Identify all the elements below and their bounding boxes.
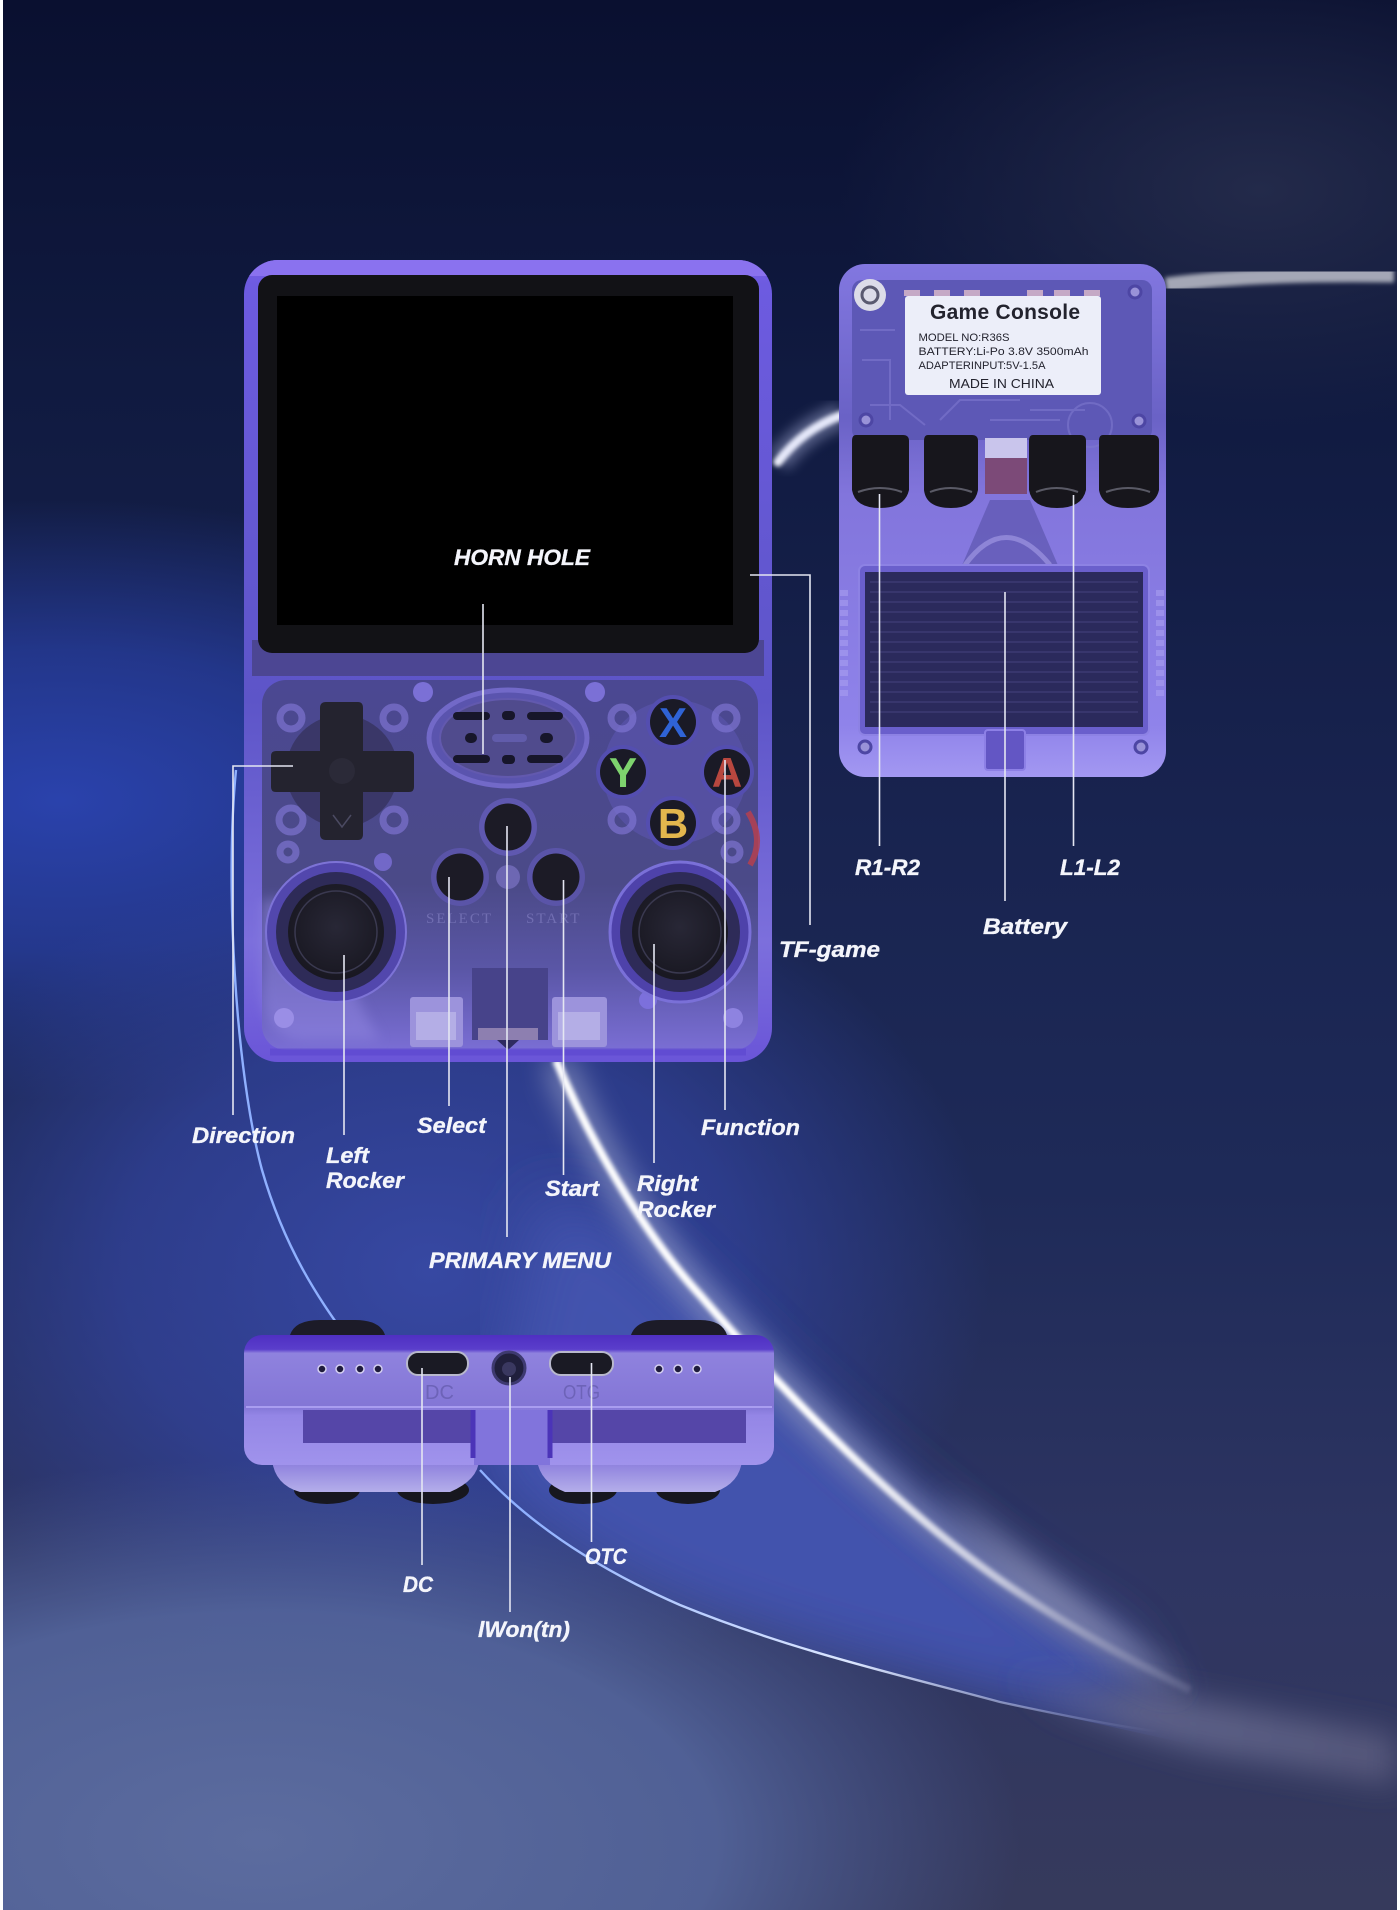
bottom edge <box>270 1048 746 1056</box>
callout: Horn Hole: HORN HOLE <box>454 545 591 570</box>
product label: MODEL NO:R36S <box>918 332 1010 344</box>
bottom latch <box>985 730 1025 770</box>
center hinge <box>960 500 1060 570</box>
chin band under screen <box>252 640 764 676</box>
screws <box>859 286 1147 753</box>
callout: Function: Function <box>701 1115 800 1140</box>
callout: TF-game: TF-game <box>779 937 880 962</box>
callout: Right Rocker <box>637 944 717 1222</box>
callout: Direction <box>192 766 295 1148</box>
bottom view console <box>244 1320 774 1504</box>
ABXY backing <box>603 700 747 844</box>
product label <box>905 296 1101 395</box>
arc: thin blue curve <box>232 770 1160 1732</box>
shell <box>839 264 1166 777</box>
ribbon <box>985 438 1027 460</box>
top sticks <box>290 1320 385 1335</box>
callout: Left Rocker: Left <box>326 1143 371 1168</box>
product label: ADAPTERINPUT:5V-1.5A <box>918 360 1046 372</box>
side grip ridges <box>844 590 1160 700</box>
callout: Battery: Battery <box>983 914 1069 939</box>
body shell <box>244 260 772 1062</box>
right stick <box>610 862 750 1002</box>
lower control panel <box>262 680 758 1050</box>
screen <box>277 296 733 625</box>
callout: Select: Select <box>417 1113 488 1138</box>
left stick <box>266 862 406 1002</box>
faint silkscreen labels: START <box>526 911 581 927</box>
callout: Start: Start <box>545 1176 601 1201</box>
battery compartment <box>859 565 1149 735</box>
grips <box>272 1460 479 1492</box>
buttons: ABXY: B <box>658 800 688 847</box>
callout: Left Rocker: Rocker <box>326 1168 406 1193</box>
buttons: ABXY: A <box>712 749 742 796</box>
callout: Right Rocker: Right <box>637 1171 700 1196</box>
red inner arc <box>748 812 757 865</box>
callout: Direction: Direction <box>192 1123 295 1148</box>
front view console <box>244 260 772 1062</box>
faint port labels <box>425 1382 600 1404</box>
inner dark windows <box>303 1410 473 1443</box>
product label: MADE IN CHINA <box>949 376 1054 391</box>
ports <box>407 1352 613 1384</box>
callout: TF-game <box>750 575 880 962</box>
icon: sticker seal <box>854 279 886 311</box>
speaker holes <box>318 1365 701 1373</box>
arc: glowing white curve <box>556 275 1394 1690</box>
buttons: ABXY <box>596 695 754 850</box>
callout: Left Rocker <box>326 955 406 1193</box>
lower corner highlights <box>262 900 380 1040</box>
trigger highlights <box>858 488 1150 492</box>
callout: Primary Menu: PRIMARY MENU <box>429 1248 612 1273</box>
lower triggers <box>294 1476 720 1504</box>
callout: OTC: OTC <box>585 1544 628 1569</box>
faint silkscreen labels <box>426 911 581 927</box>
top highlight <box>244 260 772 276</box>
seam line <box>246 1406 772 1408</box>
body <box>244 1335 774 1465</box>
buttons: ABXY: Y <box>609 749 637 796</box>
faint port labels: DC <box>425 1382 454 1404</box>
faint port labels: OTG <box>563 1382 600 1404</box>
product label: BATTERY:Li-Po 3.8V 3500mAh <box>918 346 1088 358</box>
triggers <box>852 435 1159 508</box>
callout: R1-R2: R1-R2 <box>855 855 921 880</box>
decorative screw rings <box>279 707 740 860</box>
circuit board area <box>852 280 1152 440</box>
contact pads <box>904 290 1100 296</box>
buttons: menu, select, start <box>431 798 585 906</box>
faint silkscreen labels: SELECT <box>426 911 493 927</box>
icon: d-pad <box>271 702 414 840</box>
internal circuit and connectors <box>410 968 607 1050</box>
product label: Game Console <box>930 301 1080 324</box>
callout: DC: DC <box>403 1572 434 1597</box>
screen bezel <box>258 275 759 653</box>
callout: L1-L2: L1-L2 <box>1060 855 1121 880</box>
speaker grille <box>429 690 587 786</box>
callout: garbled headphone label: lWon(tn) <box>478 1617 570 1642</box>
back view console <box>839 264 1166 777</box>
buttons: ABXY: X <box>659 699 687 746</box>
callout: Right Rocker: Rocker <box>637 1197 717 1222</box>
